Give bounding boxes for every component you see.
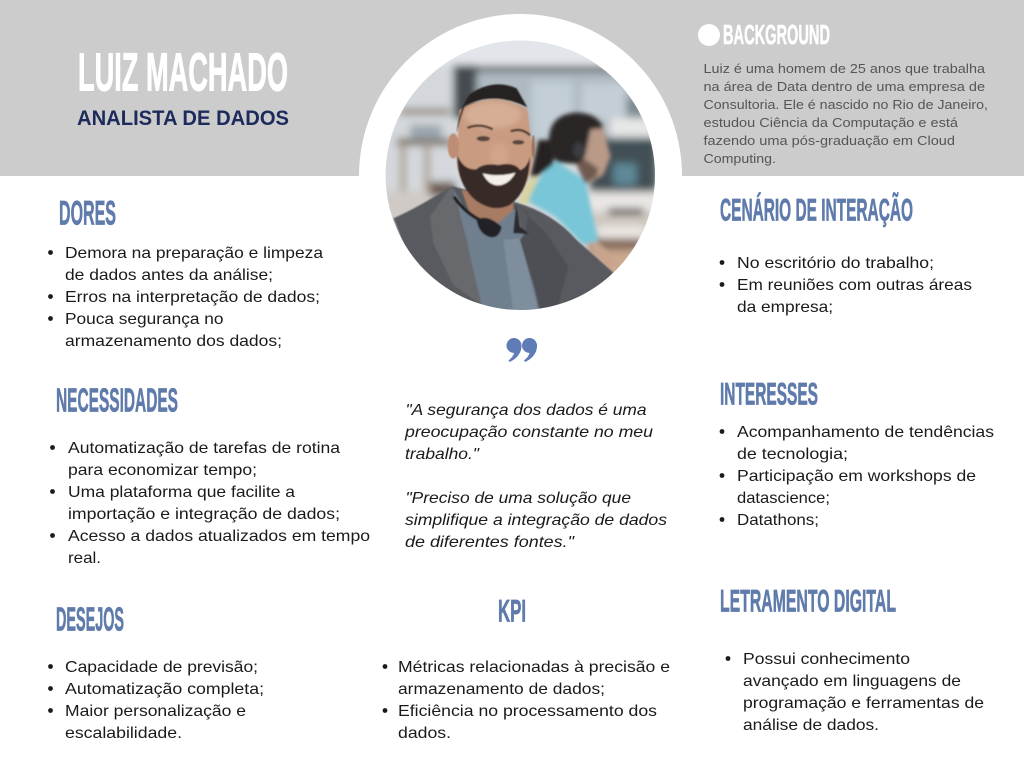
hair	[457, 84, 527, 134]
list: cenario: No escritório do trabalho;	[737, 255, 934, 272]
list: interesses	[720, 424, 994, 529]
list: desejos: Maior personalização e	[65, 703, 246, 720]
header band	[0, 0, 1024, 176]
panel: desejos: DESEJOS	[56, 602, 124, 638]
list: kpi: Eficiência no processamento dos	[398, 703, 657, 720]
list: interesses: Datathons;	[737, 512, 819, 529]
list: letramento: Possui conhecimento	[743, 651, 910, 668]
list: necessidades: importação e integração de dados;	[68, 506, 340, 523]
list: necessidades: Uma plataforma que facilite a	[68, 484, 295, 501]
shirt	[453, 188, 539, 312]
list: letramento: avançado em linguagens de	[743, 673, 961, 690]
icon: quotation mark	[507, 338, 537, 362]
list: cenario	[720, 255, 972, 316]
jacket	[393, 186, 613, 320]
panel: letramento digital	[720, 582, 984, 734]
panel: interesses	[720, 376, 994, 529]
background text: estudou Ciência da Computação e está	[704, 115, 959, 130]
right lapel	[516, 204, 568, 310]
panel: interesses: INTERESSES	[720, 376, 818, 412]
headset	[454, 197, 483, 222]
list: interesses: Participação em workshops de	[737, 468, 976, 485]
list: kpi: dados.	[398, 725, 451, 742]
quotes text: "Preciso de uma solução que	[406, 490, 631, 507]
list: cenario: da empresa;	[737, 299, 833, 316]
panel: dores: DORES	[59, 194, 116, 232]
list: necessidades: para economizar tempo;	[68, 462, 257, 479]
list: interesses: datascience;	[737, 490, 830, 507]
main man	[393, 84, 613, 320]
list: desejos: escalabilidade.	[65, 725, 182, 742]
heading: background: BACKGROUND	[723, 19, 830, 50]
panel: desejos	[48, 602, 264, 742]
quotes text: simplifique a integração de dados	[405, 512, 667, 529]
list: necessidades: Automatização de tarefas de rotina	[68, 440, 340, 457]
list: necessidades: real.	[68, 550, 101, 567]
list: dores: de dados antes da análise;	[65, 267, 273, 284]
panel: kpi	[383, 592, 670, 742]
list: desejos: Automatização completa;	[65, 681, 264, 698]
eyes	[477, 136, 490, 141]
list: dores: Demora na preparação e limpeza	[65, 245, 323, 262]
smile	[483, 173, 516, 185]
list: kpi	[383, 659, 670, 742]
list: interesses: de tecnologia;	[737, 446, 848, 463]
panel: necessidades: NECESSIDADES	[56, 382, 178, 420]
list: letramento: programação e ferramentas de	[743, 695, 984, 712]
list: desejos: Capacidade de previsão;	[65, 659, 258, 676]
list: desejos	[48, 659, 264, 742]
quotes text: "A segurança dos dados é uma	[406, 402, 647, 419]
white arch behind portrait	[359, 14, 682, 337]
list: necessidades	[50, 440, 370, 567]
quotes text: trabalho."	[405, 446, 480, 463]
panel: cenario de interacao	[720, 192, 972, 316]
heading: kpi: KPI	[498, 592, 526, 628]
portrait photo	[386, 40, 655, 310]
list: interesses: Acompanhamento de tendências	[737, 424, 994, 441]
icon: white dot	[698, 24, 720, 46]
title: name: LUIZ MACHADO	[78, 42, 288, 102]
face	[457, 99, 533, 208]
list: kpi: armazenamento de dados;	[398, 681, 605, 698]
beard	[457, 155, 530, 208]
list: dores	[48, 245, 323, 350]
list: necessidades: Acesso a dados atualizados em tempo	[68, 528, 370, 545]
eyebrows	[467, 126, 493, 129]
quotes text: preocupação constante no meu	[404, 424, 653, 441]
list: cenario: Em reuniões com outras áreas	[737, 277, 972, 294]
list: dores: armazenamento dos dados;	[65, 333, 282, 350]
quotes text: de diferentes fontes."	[405, 534, 575, 551]
list: letramento	[726, 651, 984, 734]
background text: Consultoria. Ele é nascido no Rio de Janeiro,	[704, 97, 988, 112]
list: kpi: Métricas relacionadas à precisão e	[398, 659, 670, 676]
list: letramento: análise de dados.	[743, 717, 879, 734]
background text: fazendo uma pós-graduação em Cloud	[704, 133, 955, 148]
neck	[462, 190, 513, 227]
panel: dores	[48, 194, 323, 350]
list: dores: Erros na interpretação de dados;	[65, 289, 320, 306]
panel: necessidades	[50, 382, 370, 567]
list: dores: Pouca segurança no	[65, 311, 224, 328]
left lapel	[430, 186, 482, 305]
background text: Computing.	[704, 151, 776, 166]
background text: na área de Data dentro de uma empresa de	[704, 79, 985, 94]
panel: background	[698, 19, 988, 166]
quotes text	[404, 402, 667, 551]
subtitle: role: ANALISTA DE DADOS	[77, 106, 289, 130]
background text: Luiz é uma homem de 25 anos que trabalha	[704, 61, 986, 76]
second man	[517, 109, 614, 254]
background text	[704, 61, 988, 166]
